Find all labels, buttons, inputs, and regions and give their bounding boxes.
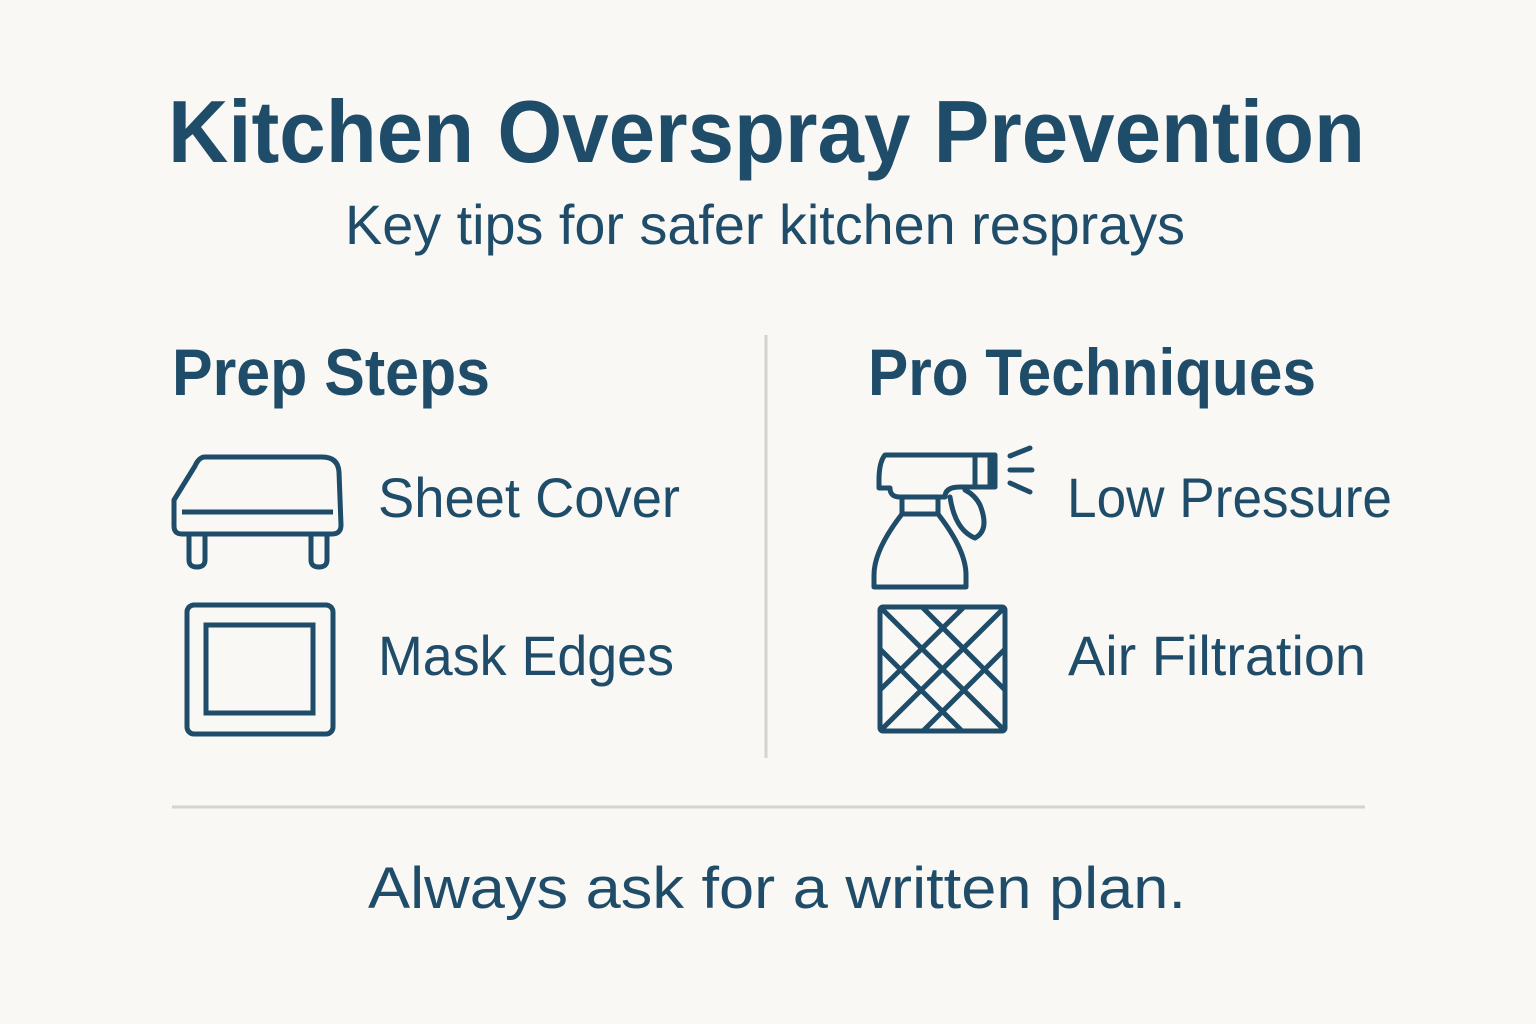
label: sheet cover: Sheet Cover [378,466,680,529]
icon: mask edges [187,605,333,734]
vertical divider [764,335,768,758]
footer: Always ask for a written plan. [368,856,1186,921]
label: low pressure: Low Pressure [1067,466,1392,529]
heading: prep steps: Prep Steps [172,335,490,409]
label: mask edges: Mask Edges [378,624,674,687]
subtitle: Key tips for safer kitchen resprays [345,193,1185,256]
icon: spray bottle [874,448,1032,587]
panel: pro techniques [868,335,1392,731]
panel: prep steps [172,335,680,734]
label: air filtration: Air Filtration [1068,624,1366,687]
icon: air filter [880,607,1005,731]
horizontal divider [172,806,1365,808]
title: Kitchen Overspray Prevention [168,82,1365,181]
heading: pro techniques: Pro Techniques [868,335,1316,409]
icon: sheet cover [174,457,341,567]
